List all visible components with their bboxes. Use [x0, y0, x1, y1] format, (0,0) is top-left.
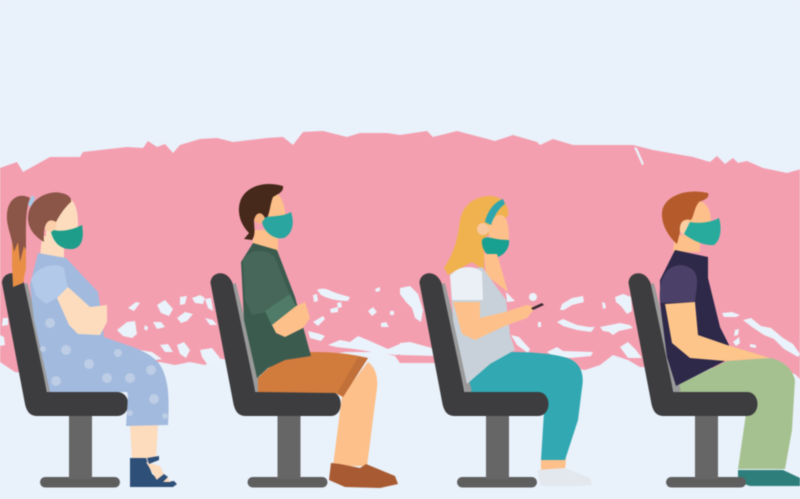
- passenger 1: woman with ponytail: [2, 192, 177, 488]
- pink brush stroke: [0, 131, 800, 384]
- seat 2: [210, 273, 341, 488]
- mask: [684, 218, 721, 245]
- mask: [482, 237, 509, 258]
- hair: [28, 192, 71, 242]
- shoe: [329, 463, 398, 488]
- passenger 2: man in green shirt: [210, 184, 398, 488]
- headband: [485, 199, 505, 225]
- arm: [665, 302, 770, 361]
- neck and head: [673, 201, 714, 252]
- seat 1: [2, 273, 128, 488]
- arm: [57, 287, 107, 335]
- shirt: [450, 267, 515, 384]
- trousers: [467, 352, 583, 460]
- long hair: [444, 196, 508, 275]
- seat 4: [628, 273, 758, 488]
- neck and head: [252, 190, 288, 252]
- hair: [662, 192, 708, 244]
- shirt: [241, 243, 311, 378]
- passenger 4: man in navy polo: [628, 192, 800, 487]
- hair: [239, 184, 283, 240]
- leg: [333, 362, 377, 466]
- trousers: [673, 358, 795, 469]
- shoe: [738, 470, 800, 486]
- neck and face: [40, 197, 78, 258]
- mask: [51, 225, 83, 249]
- shorts: [258, 352, 368, 397]
- ankle: [541, 458, 566, 472]
- neck: [484, 254, 508, 292]
- mask: [262, 212, 293, 238]
- arm and phone: [453, 302, 544, 340]
- brush flecks: [0, 147, 800, 369]
- ponytail: [7, 195, 35, 287]
- face: [477, 215, 509, 245]
- legs and sandals: [130, 424, 177, 487]
- hands: [272, 302, 310, 337]
- passenger 3: woman with phone: [420, 196, 592, 488]
- dress: [30, 253, 169, 426]
- seat 3: [420, 273, 548, 488]
- shoe: [537, 468, 592, 486]
- shirt: [660, 250, 729, 386]
